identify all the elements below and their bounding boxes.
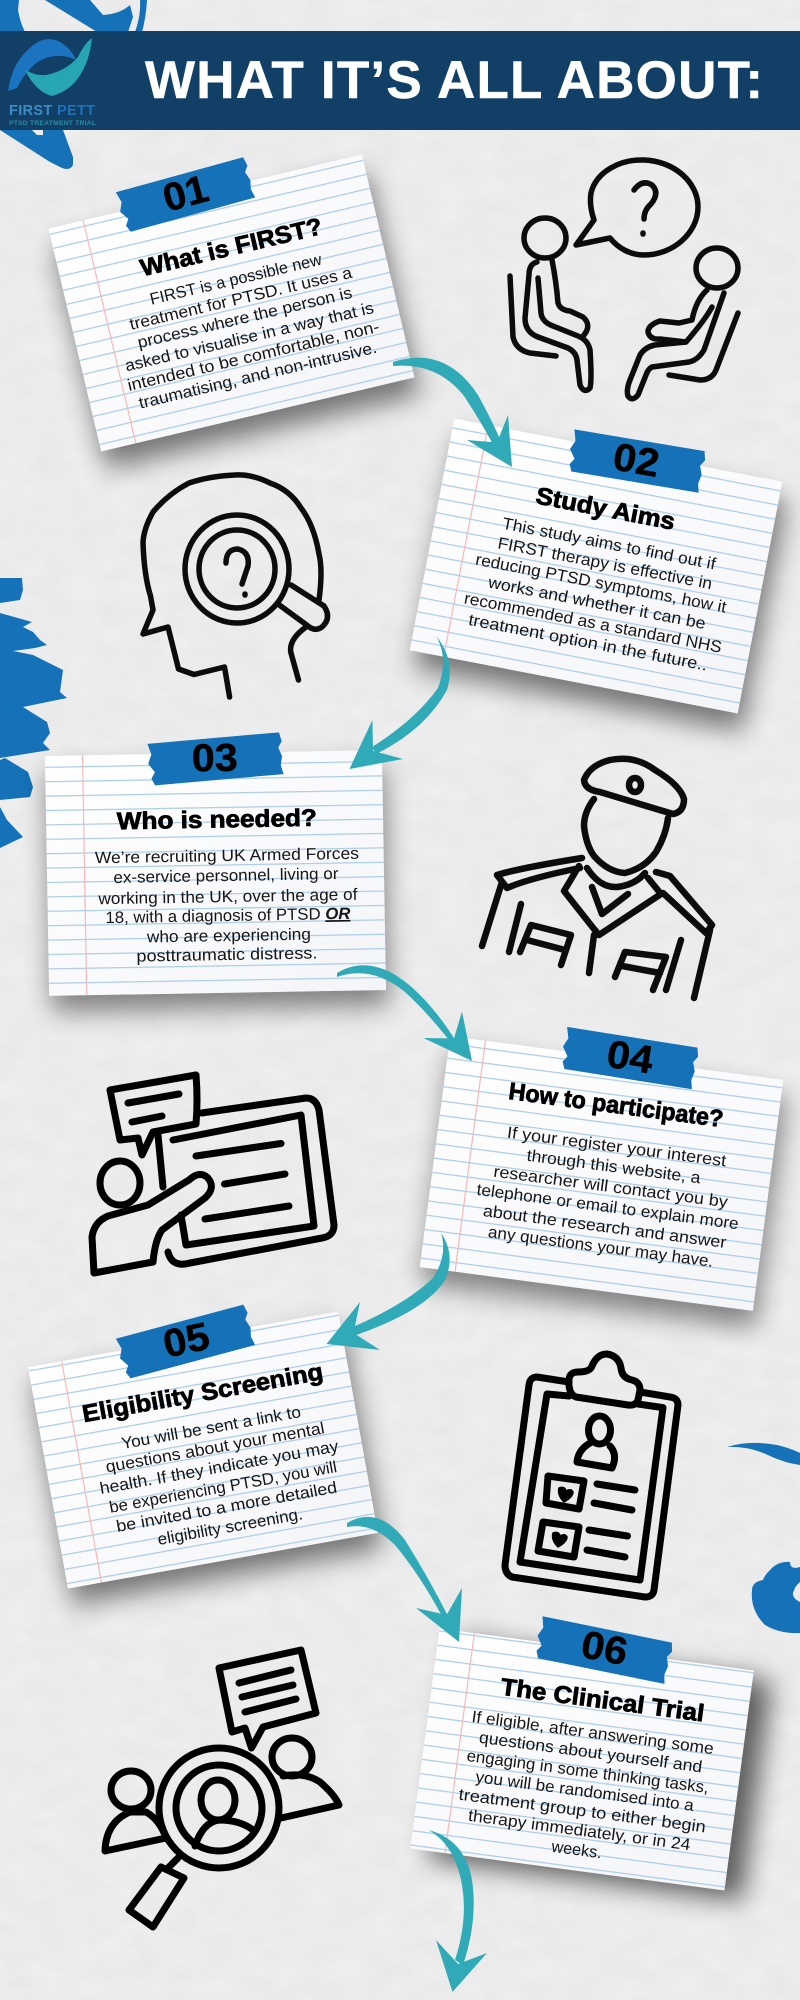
body text: works and whether it can be	[486, 573, 707, 633]
body text: be invited to a more detailed	[115, 1479, 339, 1536]
decorative blue swoosh: top left	[0, 0, 147, 169]
body text: posttraumatic distress.	[136, 944, 318, 966]
card 03: Who is needed?	[45, 732, 389, 1012]
card 06: The Clinical Trial: 06	[578, 1623, 631, 1674]
body text: health. If they indicate you may	[98, 1437, 341, 1498]
card 02: Study Aims	[410, 419, 786, 731]
heading: What is FIRST?	[138, 213, 325, 282]
tape and number 01	[115, 157, 256, 233]
paper	[28, 1311, 378, 1589]
body text: reducing PTSD symptoms, how it	[474, 551, 728, 617]
icon: two people talking with question bubble	[510, 160, 738, 399]
body text: asked to visualise in a way that is	[123, 299, 376, 375]
body text: treatment option in the future..	[467, 611, 709, 675]
body text: questions about your mental	[104, 1419, 326, 1476]
body text: You will be sent a link to	[120, 1403, 302, 1453]
body text: about the research and answer	[482, 1202, 728, 1252]
tape and number 06	[533, 1616, 674, 1684]
body text: be experiencing PTSD, you will	[108, 1458, 338, 1517]
body text	[463, 515, 728, 675]
card 03: Who is needed?: 03	[191, 737, 238, 780]
tape and number 02	[566, 429, 707, 493]
heading: Study Aims	[534, 483, 677, 536]
header banner	[0, 31, 800, 130]
card 02: Study Aims: 02	[610, 436, 663, 486]
body text: questions about yourself and	[478, 1729, 703, 1776]
card 05: Eligibility Screening: 05	[159, 1315, 213, 1367]
arrow 5 to 6	[347, 1517, 462, 1642]
card 06: The Clinical Trial	[410, 1616, 772, 1901]
body text: therapy immediately, or in 24	[467, 1807, 692, 1854]
body text: any questions your may have.	[487, 1223, 714, 1271]
card 05: Eligibility Screening	[28, 1304, 383, 1605]
heading: The Clinical Trial	[499, 1674, 706, 1728]
arrow 6 down	[429, 1830, 487, 1992]
body text	[458, 1708, 715, 1862]
body text: traumatising, and non-intrusive.	[137, 339, 379, 412]
paper	[48, 155, 415, 451]
body text: engaging in some thinking tasks,	[466, 1747, 710, 1797]
card 04: How to participate?: 04	[604, 1033, 656, 1083]
body text: treatment group to either begin	[458, 1786, 707, 1836]
heading: Who is needed?	[117, 805, 317, 835]
tape and number 04	[560, 1027, 699, 1089]
body text: ex-service personnel, living or	[113, 865, 339, 887]
body text: If eligible, after answering some	[471, 1708, 715, 1758]
body text: recommended as a standard NHS	[463, 589, 723, 657]
tape and number 03	[146, 732, 285, 786]
card 04: How to participate?	[420, 1027, 786, 1327]
arrow 4 to 5	[326, 1233, 450, 1350]
arrow 3 to 4	[337, 965, 472, 1061]
body text: process where the person is	[136, 284, 354, 352]
body text: If your register your interest	[506, 1124, 728, 1170]
body text: through this website, a	[526, 1147, 702, 1187]
body text	[95, 845, 359, 966]
heading: Eligibility Screening	[80, 1358, 325, 1428]
logo: FIRST PETT: PTSD TREATMENT TRIAL	[9, 120, 96, 127]
body text: FIRST therapy is effective in	[496, 534, 714, 593]
body text	[476, 1124, 740, 1271]
icon: presenter pointing at board	[92, 1075, 334, 1273]
logo: FIRST PETT: FIRST PETT	[9, 103, 95, 119]
icon: soldier with beret	[482, 759, 712, 998]
body text: FIRST is a possible new	[148, 251, 324, 309]
tape and number 05	[115, 1304, 256, 1380]
card 01: What is FIRST?: 01	[158, 167, 213, 221]
heading: How to participate?	[507, 1078, 725, 1133]
body text: eligibility screening.	[156, 1505, 304, 1549]
body text: telephone or email to explain more	[476, 1181, 740, 1233]
body text: This study aims to find out if	[501, 515, 718, 574]
body text: treatment for PTSD. It uses a	[128, 264, 355, 334]
logo: FIRST PETT	[8, 38, 96, 127]
body text: 18, with a diagnosis of PTSD OR	[105, 905, 351, 927]
body text: who are experiencing	[146, 926, 311, 946]
icon: magnifier over people with speech bubble	[105, 1650, 339, 1927]
icon: head with magnifying glass and question mark	[143, 475, 328, 697]
icon: clipboard with profile and checklist	[505, 1354, 678, 1597]
paper	[45, 750, 386, 996]
title: WHAT IT’S ALL ABOUT:	[145, 51, 763, 110]
body text	[98, 1403, 341, 1549]
paper	[420, 1036, 783, 1311]
paper	[410, 419, 782, 713]
arrow 1 to 2	[393, 358, 512, 467]
body text: you will be randomised into a	[474, 1768, 696, 1815]
card 01: What is FIRST?	[48, 155, 420, 469]
paper	[410, 1629, 754, 1890]
body text: researcher will contact you by	[492, 1163, 730, 1211]
body text: working in the UK, over the age of	[97, 886, 358, 908]
body text: weeks.	[549, 1838, 603, 1862]
body text: We’re recruiting UK Armed Forces	[95, 845, 359, 867]
body text	[123, 251, 381, 412]
decorative blue swoosh: right edge	[727, 1443, 800, 1633]
decorative blue brush: left edge	[0, 578, 67, 848]
body text: intended to be comfortable, non-	[126, 318, 381, 395]
arrow 2 to 3	[350, 636, 450, 769]
